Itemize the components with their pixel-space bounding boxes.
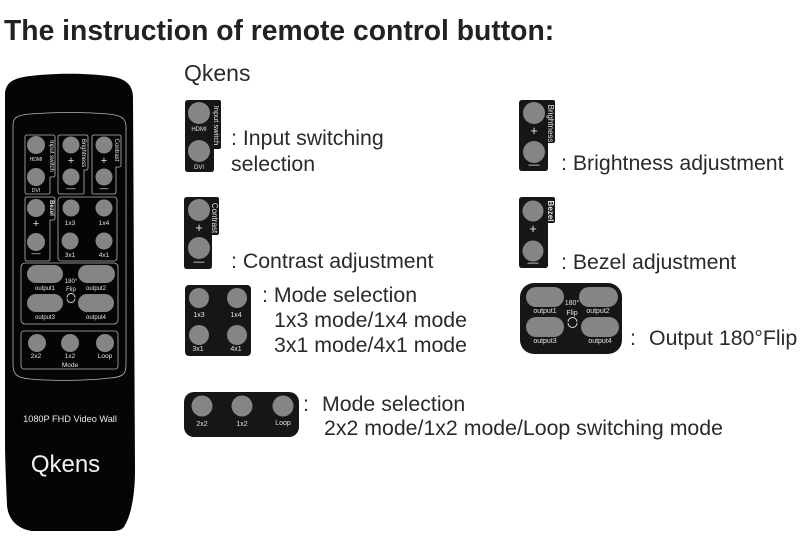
icon: input switch: Input switch xyxy=(212,106,221,145)
icon: input switch: DVI xyxy=(194,165,204,171)
brightness group xyxy=(58,135,88,194)
output flip group: 180° xyxy=(65,279,78,285)
output flip group xyxy=(21,263,118,324)
icon: mode selection 4 buttons: 3x1 xyxy=(192,346,204,353)
icon: bezel: — xyxy=(528,257,538,269)
mode group 1x3 1x4 3x1 4x1: 1x4 xyxy=(99,220,110,227)
icon: mode selection 4 buttons: 1x3 xyxy=(193,312,205,319)
icon: brightness: + xyxy=(530,123,538,138)
icon: bezel: + xyxy=(529,221,537,236)
bezel group: Bezel xyxy=(48,200,54,216)
brightness label: : Brightness adjustment xyxy=(561,151,784,175)
input switch group: DVI xyxy=(32,188,40,194)
mode selection label: : Mode selection xyxy=(262,283,417,307)
icon: brightness: Brightness xyxy=(546,105,555,142)
icon: mode selection 4 buttons: 4x1 xyxy=(230,346,242,353)
output flip group: output4 xyxy=(86,315,107,321)
icon: bezel xyxy=(519,197,555,269)
output flip label: : xyxy=(630,326,636,350)
remote model text: 1080P FHD Video Wall xyxy=(23,414,117,424)
loop mode label: 2x2 mode/1x2 mode/Loop switching mode xyxy=(324,416,723,440)
input switch group: Input switch xyxy=(48,140,54,172)
icon: input switch: HDMI xyxy=(191,127,207,133)
icon: mode selection 3 buttons: 2x2 xyxy=(196,421,208,428)
title: The instruction of remote control button: xyxy=(4,14,554,46)
input switch group: HDMI xyxy=(30,157,42,163)
icon: output flip: 180° xyxy=(565,299,579,307)
bezel group xyxy=(25,197,55,261)
bezel label: : Bezel adjustment xyxy=(561,250,736,274)
icon: mode selection 3 buttons: Loop xyxy=(275,420,291,427)
icon: mode selection 4 buttons xyxy=(185,285,251,356)
icon: output flip: output4 xyxy=(588,338,612,345)
contrast group xyxy=(92,135,121,194)
icon: contrast xyxy=(184,197,219,269)
output flip label: Output 180°Flip xyxy=(649,326,797,350)
icon: output flip: output1 xyxy=(533,308,557,315)
loop mode label: Mode selection xyxy=(322,392,465,416)
output flip group: Flip xyxy=(66,287,76,293)
contrast group: + xyxy=(101,155,107,167)
remote brand: Qkens xyxy=(31,451,100,478)
mode group 1x3 1x4 3x1 4x1: 1x3 xyxy=(65,220,76,227)
icon: contrast: — xyxy=(194,256,204,268)
mode group 1x3 1x4 3x1 4x1 xyxy=(58,197,117,261)
mode selection label: 3x1 mode/4x1 mode xyxy=(274,333,467,357)
icon: contrast: Contrast xyxy=(210,203,219,234)
icon: contrast: + xyxy=(195,220,203,235)
icon: brightness xyxy=(519,100,555,171)
brightness group: — xyxy=(66,183,76,193)
brightness group: + xyxy=(68,155,74,167)
bezel group: — xyxy=(32,248,40,258)
mode group 2x2 1x2 loop: 1x2 xyxy=(65,353,76,360)
mode selection label: 1x3 mode/1x4 mode xyxy=(274,308,467,332)
mode group 2x2 1x2 loop: 2x2 xyxy=(31,353,42,360)
icon: input switch xyxy=(185,100,221,172)
icon: output flip xyxy=(520,283,622,354)
icon: brightness: — xyxy=(528,159,540,171)
loop mode label: : xyxy=(303,392,309,416)
input switch group xyxy=(25,135,55,194)
icon: output flip: Flip xyxy=(566,310,578,317)
contrast label: : Contrast adjustment xyxy=(231,249,433,273)
icon: output flip: output3 xyxy=(533,338,557,345)
icon: bezel: Bezel xyxy=(546,201,555,221)
remote control xyxy=(5,74,135,531)
output flip group: output1 xyxy=(35,286,56,292)
output flip group: output2 xyxy=(86,286,107,292)
icon: mode selection 3 buttons xyxy=(184,392,299,437)
mode group 2x2 1x2 loop xyxy=(21,331,118,369)
mode group 2x2 1x2 loop: Mode xyxy=(62,362,79,369)
contrast group: — xyxy=(100,183,108,193)
contrast group: Contrast xyxy=(113,139,119,162)
brand heading: Qkens xyxy=(184,60,250,86)
mode group 1x3 1x4 3x1 4x1: 4x1 xyxy=(99,252,110,259)
icon: mode selection 3 buttons: 1x2 xyxy=(236,421,248,428)
input switch label: selection xyxy=(231,152,315,176)
bezel group: + xyxy=(33,218,39,230)
icon: output flip: output2 xyxy=(586,308,610,315)
mode group 1x3 1x4 3x1 4x1: 3x1 xyxy=(65,252,76,259)
input switch label: : Input switching xyxy=(231,126,384,150)
icon: mode selection 4 buttons: 1x4 xyxy=(230,312,242,319)
output flip group: output3 xyxy=(35,315,56,321)
mode group 2x2 1x2 loop: Loop xyxy=(98,353,113,360)
brightness group: Brightness xyxy=(80,139,86,167)
